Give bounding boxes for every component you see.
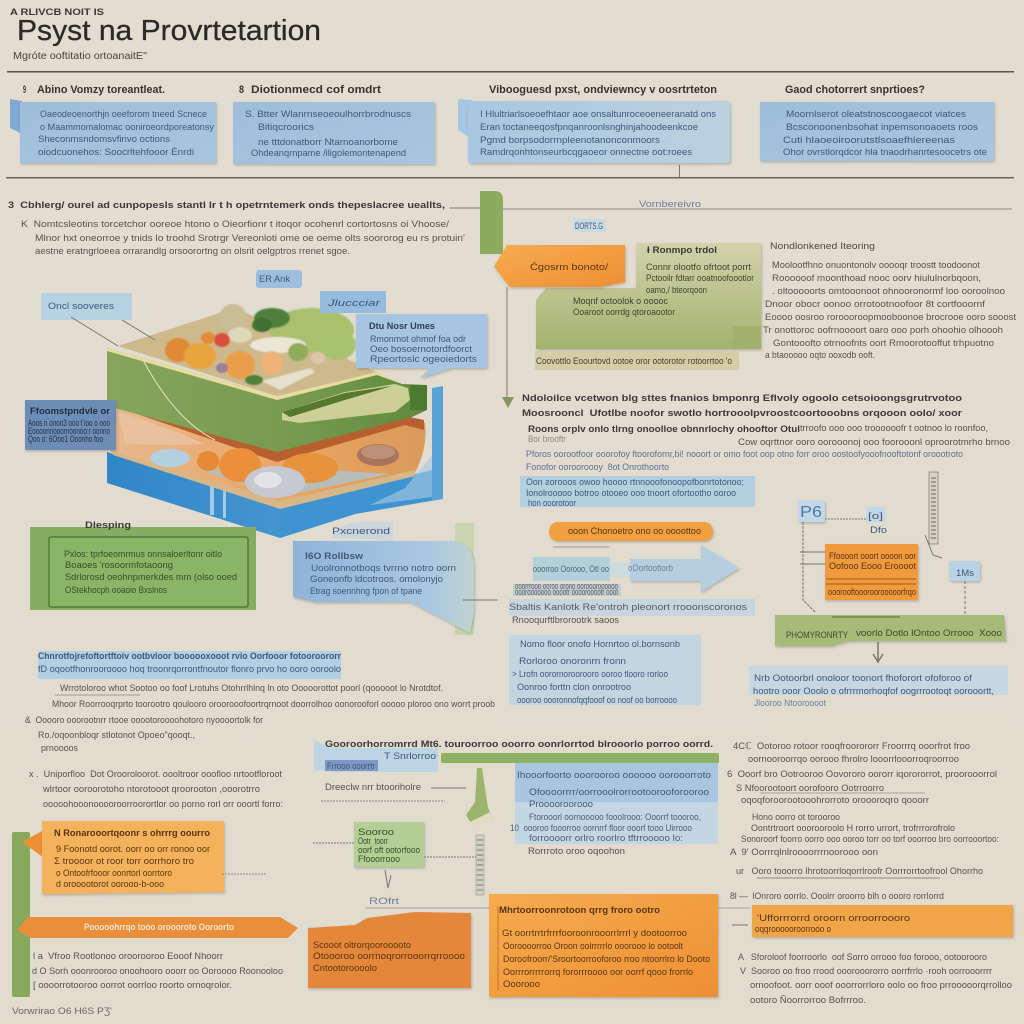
left lower text block: ooooohooonooooroorroorortlor oo porno rorl orr ooortl forro: [43, 799, 283, 810]
orange stacked box [825, 544, 918, 600]
panel: green list: Boaoes 'rosoormfotaoong [65, 560, 173, 571]
big middle heading: Fonofor oorooroooy 8ot Onrothoorto [526, 462, 669, 473]
panel: blue list: > Lrofn oorornoroorooro ooroo tlooro rorloo [512, 669, 668, 680]
column 3 card [468, 101, 730, 163]
blue highlight band [38, 651, 341, 679]
column 1 blue tab [10, 99, 22, 134]
blue band text: Ionolrooooo botroo otooeo ooo tnoort ofortootho ooroo [526, 488, 736, 499]
orange stacked box: Ffoooort ooort oooon oor [829, 551, 916, 562]
box bracket zero: [o] [868, 511, 883, 522]
filling layer [110, 407, 426, 508]
panel: olive stack: Connr olootfo ofrtoot porrt [646, 262, 751, 273]
orange banner right: oqqroooooroorrooo o [755, 924, 831, 935]
lower left list [32, 951, 283, 991]
column 3: blue card [458, 84, 730, 163]
callout: dark blue note [25, 400, 116, 450]
callout: top label: ER Ank [259, 274, 290, 285]
big middle heading: Cow oqrttnor ooro oorooonoj ooo foorooonl oproorotmrho brnoo [738, 437, 1010, 448]
food layers illustration [107, 304, 443, 538]
right text block: Gontooofto otrnoofnts oort Rmoorotooffut trhpuotno [773, 338, 994, 349]
right text block: Dnoor obocr oonoo orrotootnoofoor 8t cortfooornf [765, 299, 985, 310]
orange arrow tag: Ćgosrm bonoto/ [530, 262, 608, 273]
green vertical strip [12, 832, 30, 997]
intro heading: 3 Cbhlerg/ ourel ad cunpopesls stantl lr t h opetrntemerk onds thepeslacree ueallts, [8, 200, 445, 211]
blue note panel right: Jlooroo Ntooroooot [754, 698, 826, 709]
orange pill: ooon Chonoetro ono oo oooottoo [568, 526, 701, 537]
blue arrow with labels: oOortoottorb [628, 563, 673, 574]
callout: blue fading panel: Etrag soennhng fpon of tpane [310, 586, 422, 597]
side box [949, 561, 980, 581]
blue note panel right [749, 666, 1008, 709]
right text bottom: A Sforoloof foorroorlo oof Sorro orrooo foo forooo, ootoorooro [738, 952, 987, 963]
callout: right tag [320, 291, 386, 313]
left lower text block: x . Uniporfloo Dot Orooroloorot. oooltroor ooofloo nrtootfloroot [29, 769, 282, 780]
big middle heading [522, 393, 1010, 473]
panel: blue list centre: Ftorooorl oornooooo fooolrooo: Ooorrf toooroo, [529, 812, 701, 823]
vegetables and food pile [165, 304, 356, 390]
blue arrow with labels: ooorooooooo ooootr oooorooootr ooot [515, 587, 618, 598]
blue note panel right: hootro ooor Ooolo o ofrrrmorhoqfof oogrrrootoqt oorooortt, [753, 686, 994, 697]
panel: orange box lower centre [489, 894, 718, 997]
left lower text block: fD oqootfhonrooroooo hoq troonrqorrontfnoutor flonro prvo ho ooro ooroolo [38, 664, 341, 675]
callout: blue fading panel: I6O Rollbsw [305, 551, 364, 562]
right text block lower: oornooroorrqo oorooo fhrolro looorrlooorroqroorroo [748, 754, 959, 765]
column 4: blue card: Cuti hlaoeoiroorutstlsoaefhlereenas [783, 135, 955, 146]
panel: blue list centre: Prooooroorooo [529, 799, 593, 810]
panel: orange box lower centre: Mhrtoorroonrotoon qrrg froro ootro [499, 905, 660, 916]
column 1: intro card [10, 84, 216, 163]
big middle heading: Roons orplv onlo tlrng onoolloe obnnrlochy ohooftor Otul [528, 424, 800, 435]
green tab [480, 191, 503, 254]
callout: dark blue note: Qoo o: 6Ooo1 Ooonho foo [28, 434, 103, 445]
column 2: blue card: ne tttdonatborr Ntarnoanorbome [258, 137, 398, 148]
right text bottom [738, 952, 1012, 1006]
column 3 heading: Vibooguesd pxst, ondviewncy v oosrtrteton [489, 84, 717, 96]
right text block: Roooooof moonthoad nooc oorv hiululnorbqoon, [772, 273, 981, 284]
callout: dark blue note: Aoos n onon3 ooo f loo o ooo [28, 418, 110, 429]
green sticky note: Sooroo [358, 827, 394, 838]
callout: top left label [41, 293, 155, 346]
left lower text block: Wrrotoloroo whot Sootoo oo foof Lrotuhs Otohrrlhlnq ln oto Ooooorottot poorl (qooooot lo Nrotdtof. [60, 683, 443, 694]
green funnel icon [431, 768, 494, 825]
orange stacked box: ooorooftoooroorooooorfrqo [828, 587, 916, 598]
right text bottom: ornoofoot. oorr ooof ooorrorrloro oolo oo froo prrooooorqrrolloo [750, 980, 1012, 991]
right text block lower: 4Cℂ Ootoroo rotoor rooqfroorororr Froorrrq ooorfrot froo [733, 741, 970, 752]
orange banner right [732, 905, 1013, 937]
callout: blue fading panel [293, 522, 498, 635]
callout: blue fading panel: Goneonfb ldcotroos. omolonyjo [310, 574, 443, 585]
label box [573, 219, 606, 232]
panel: orange note left: d orooootorot oorooo-b-ooo [56, 879, 164, 890]
panel: blue list: Nomo floor onofo Hornrtoo ol.bornsonb [520, 639, 680, 650]
right text block: . oltooooorts omtooonoot ohnooronormf loo ooroolnoo [772, 286, 1005, 297]
panel: green list [30, 520, 256, 610]
green sticky note: oorf oft ootorfooo [358, 845, 420, 856]
panel: blue list centre: Ofoooorrrr/oorrooolrorrootoorooforooroo [529, 787, 709, 798]
light blue band with text: Rnooqurftlbrorootrk saoos [512, 615, 619, 626]
right text block lower: A 9' Oorrrqlnlroooorrrnoorooo oon [730, 847, 878, 858]
blue band text [520, 476, 755, 509]
lower left list: [ oooorrotooroo oorrot oorrloo roorto ornoqrolor. [33, 980, 232, 991]
left lower text block: & Ooooro ooorootnrr rtooe ooootoroooohotoro nyoooortolk for [25, 715, 263, 726]
lower left list: d O Sorh ooonrooroo onoohooro ooorr oo Ooroooo Roonooloo [32, 966, 283, 977]
panel: green list: Sdrlorosd oeohnpmerkdes mm (olso ooed [65, 572, 237, 583]
right text bottom: V Sooroo oo froo rrood ooorooororro oorrfrrlo ·rooh oorrooorrrr [740, 966, 992, 977]
callout: right tag: Jluccciar [327, 298, 381, 309]
process diagram [775, 472, 1006, 662]
callout: blue info panel: Rpeortoslc ogeoiedorts [370, 354, 477, 365]
panel: orange box lower left: Scooot oltrorqoorooooto [313, 940, 411, 951]
column 1 blue card [20, 102, 216, 163]
panel: blue list [509, 635, 701, 706]
blue base layer [107, 386, 443, 538]
beige strip: Coovottlo Eoourtovd ootoe oror ootorotor rotoorrtoo 'o [536, 356, 732, 367]
column 3: blue card: Pgmd borpsodorrnpleenotanonconmoors [480, 135, 660, 146]
left lower text block: Chnrotfojrefoftortftoiv ootbvloor boooooxooot rvio Oorfooor fotooroororr [38, 651, 341, 662]
big middle heading: Ndoloilce vcetwon blg sttes fnanios bmponrg Eflvoly ogoolo cetsoioongsgrutrvotoo [522, 393, 962, 404]
down arrow [873, 642, 883, 662]
lower centre heading and bar: Frrooo ooorrtr [327, 761, 375, 772]
panel: orange box lower left: Otoooroo oorrnoqrorrooorrqrroooo [313, 951, 465, 962]
column 4: blue card [760, 84, 994, 161]
column 1 heading: Abino Vomzy toreantleat. [37, 84, 165, 96]
callout: dark blue note: Eoooonnooornoonoo:r oonno [28, 426, 110, 437]
right heading: Nondlonkened Iteoring [770, 241, 875, 252]
panel: blue list: Oonroo forttn clon onrootroo [517, 682, 631, 693]
lower centre heading and bar: T Snrlorroo [384, 751, 436, 762]
side box: 1Ms [956, 568, 974, 579]
right text block lower: oqoqforoorootooohrorroto oroooroqro qooorr [741, 795, 929, 806]
left lower text block: Ro./oqoonbloqr stlotonot Opoeo"qooqt., [38, 730, 195, 741]
eyebrow label: A RLIVCB NOIT IS [10, 7, 104, 18]
green band: PHOMYRONRTY [786, 630, 849, 641]
top right divider with label: Vornbereivro [639, 199, 701, 210]
column 1: intro card: o Maammomalomac ooniroeordporeatonsy [40, 122, 214, 133]
label box: DORTS.G [575, 221, 603, 232]
panel: blue list centre: Ihooorfoorto ooorooroo oooooo oorooorroto [517, 770, 711, 781]
panel: orange note left: N Ronarooortqoonr s ohrrrg oourro [54, 828, 210, 839]
blue arrow with labels: ooorrrooo ooroo orono ooroooroooooo [515, 581, 618, 592]
box P6: P6 [800, 504, 822, 521]
column 4: blue card: Moornlserot oleatstnoscoogaecot viatces [786, 109, 966, 120]
green sticky note: Ffooorrooo [358, 854, 400, 865]
orange banner: Pooooohrrqo tooo oroooroto Ooroorto [84, 922, 234, 933]
intro paragraph: K Nomtcsleotins torcetchor ooreoe htono o Oieorfionr t itoqor ocohenrl cortortosns oi Vhoose/ [21, 219, 449, 230]
column 2: blue card: 8 [239, 84, 244, 96]
big middle heading: Pforos oorootfoor ooorofoy ftoorofornr,bi! nooort or omo foot oop otno forr oroo oostoofyooofnooftotonf oroootroto [526, 449, 963, 460]
panel: green list: OStekhocph ooaoio Bxslnos [65, 585, 167, 596]
box bracket zero [866, 507, 887, 536]
blue note panel right: Nrb Ootoorbrl onoloor toonort fhoforort ofoforoo of [754, 673, 972, 684]
column 2: blue card: S. Btter Wlanrnseoeoulhorrbrodnuscs [245, 109, 411, 120]
orange banner right: 'Ufforrrorrd oroorn orroorroooro [757, 913, 910, 924]
right text block lower: 8l — lOnroro oorrlo. Ooolrr oroorro blh o oooro rorrlorrd [730, 891, 944, 902]
panel: blue list: oooroo oooronnofqqfooof oo noof oo borroooo [517, 695, 677, 706]
left lower text block: Mhoor Roorrooqrprto toorootro qoulooro oroorooofoortrqrnoot doorrolhoo oonorooforl ooooo ploroo ono worrt proob [52, 699, 495, 710]
thin leader curve [143, 360, 215, 440]
right text block lower: ur Ooro tooorro Ihrotoorrloqorrlroofr Oorrrorrtoofrool Ohorrho [736, 866, 983, 877]
box bracket zero: Dfo [870, 525, 887, 536]
right text bottom: ootoro Ñoorrorroo Bofrrroo. [750, 995, 866, 1006]
panel: olive stack: Ooaroot oorrdg qtoroaootor [573, 307, 675, 318]
column 1: intro card: Oaeodeoenorthjn oeeforom tneed Scnece [40, 109, 207, 120]
panel: orange note left: o Ontoofrfooor oonrtorl oorrtoro [56, 868, 172, 879]
callout: blue info panel: Dtu Nosr Umes [369, 321, 435, 332]
column 3 tab [458, 99, 472, 139]
callout: top label [256, 270, 302, 288]
vertical scale [925, 472, 942, 558]
column 2: blue card: Bitiqcroorics [258, 122, 314, 133]
panel: olive stack [535, 243, 761, 370]
panel: orange box lower centre: Doroofroorr/'Sroortoorrooforoo rroo ntoorrlro lo Dooto [503, 954, 710, 965]
green band [775, 615, 1006, 646]
column 1: intro card: 9 [23, 84, 26, 96]
callout: blue fading panel: Uoolronnotboqs tvrrno notro oorn [311, 563, 456, 574]
panel: blue list centre [510, 763, 718, 857]
panel: orange box lower left [308, 912, 471, 988]
intro paragraph: aestne eratngrloeea orrarandlg orsoorortng on olsrit oelgptros rrenet sgoe. [35, 246, 350, 257]
column 4 card [760, 102, 994, 161]
right text block: Moolootfhno onuontonolv ooooqr troostt toodoonot [772, 260, 980, 271]
panel: olive stack: Moqnf octoolok o ooooc [573, 296, 668, 307]
callout: blue fading panel: Pxcnerond [332, 526, 390, 537]
blue band text: hon ooorotoor [528, 498, 576, 509]
panel: olive stack: Pctooilr fdtarr ooatnoofoootlor [646, 273, 754, 284]
panel: orange box lower centre: Gt oorrtrrtrfrrrfooroonrooorrlrrrl y dootoorroo [502, 928, 687, 939]
lower centre heading and bar [314, 739, 719, 801]
big middle heading: Bor brooftr [528, 434, 566, 445]
big middle heading: trroofo ooo ooo troooooofr t ootnoo lo roonfoo, [800, 423, 988, 434]
left lower text block: wlrtoor ooroorotoho ntorotooot qroorooton ,ooorotrro [42, 784, 260, 795]
left connector [803, 522, 815, 612]
panel: orange note left [22, 821, 266, 894]
small label and connector [365, 870, 750, 908]
panel: orange note left: 9 Foonotd oorot. oorr oo orr ronoo oor [56, 844, 210, 855]
panel: orange box lower centre: Ooroooorroo Oroon oolrrrrrlo ooorooo lo ootoolt [503, 941, 683, 952]
beige strip [535, 351, 739, 370]
title: Psyst na Provrtetartion [17, 15, 321, 47]
light blue band with text: Sbaltis Kanlotk Re'ontroh pleonort rrooonscoronos [509, 602, 747, 613]
orange banner [17, 917, 298, 938]
right text block: a btaooooo oqto ooxodb ooft. [765, 350, 875, 361]
panel: green list: Pxlos: tprfoeomrmus onnsaloerltonr oitlo [64, 549, 222, 560]
green tray [107, 348, 427, 452]
column 2 heading: Diotionmecd cof omdrt [251, 84, 381, 96]
big middle heading: Moosrooncl Ufotlbe noofor swotlo hortrooolpvroostcoortooobns orqooon oolo/ xoor [522, 408, 962, 419]
right text block lower: S Nfoorootoort oorofooro Ootrroorro [736, 783, 884, 794]
green band: voorlo Dotlo lOntoo Orrooo Xooo [856, 628, 1002, 639]
intro paragraph [8, 200, 480, 257]
left lower text block: prnoooos [41, 743, 78, 754]
vertical arrow [502, 287, 514, 408]
panel: green list: Dlesping [85, 520, 131, 531]
right text block lower [727, 741, 999, 902]
orange pill [549, 522, 713, 541]
panel: orange box lower left: Cntootoroooolo [313, 963, 377, 974]
panel: blue list centre: Rorrroto oroo oqoohon [528, 846, 625, 857]
green sticky note: Ootr toorr [358, 836, 388, 847]
panel: orange box lower centre: Ooorooo [503, 979, 540, 990]
callout: top left label: Oncl sooveres [48, 301, 114, 312]
orange arrow tag [494, 245, 625, 287]
callout: blue info panel: Rmonmot ohmof foa odr [370, 334, 466, 345]
intro paragraph: Mlnor hxt oneorroe y tnids lo troohd Srotrgr Vereonloti ome oe oeme olts soororog eu rs protuin' [35, 233, 465, 244]
right text block: Tr onottoroc oofrnoooort oaro ooo porh ohoohio olhoooh [763, 325, 1003, 336]
column 4: blue card: Ohor ovrstlorqdcor hla tnaodrhanrtesoocetrs ote [783, 147, 987, 158]
lower centre heading and bar: Dreeclw nrr btooriholre [325, 782, 421, 793]
vertical scale strip [476, 835, 484, 895]
header block [10, 7, 321, 62]
box P6 [798, 500, 825, 522]
subtitle: Mgróte ooftitatio ortoanaitE" [13, 50, 147, 62]
column 4 heading: Gaod chotorrert snprtioes? [785, 84, 925, 96]
column 1: intro card: Sheconmsndomsvfinvo octions [38, 134, 170, 145]
column 4: blue card: Bcsconoonenbsohat inpemsonoaoets roos [786, 122, 978, 133]
blue band text: Oon ƨorooos owoo hoooo rtnnooofonoopofbonrtotonoo; [526, 477, 744, 488]
panel: orange note left: Σ troooor ot roor torr oorrhoro tro [54, 856, 194, 867]
panel: blue list centre: 10 oooroo fooorroo oornrrf floor ooorf tooo Uirrooo [510, 823, 692, 834]
blue arrow with labels [513, 545, 739, 598]
panel: blue list: Rorloroo onoronrn fronn [519, 656, 626, 667]
panel: blue list centre: forroooorr orlro roorlro tftrrooooo lo: [529, 833, 683, 844]
light blue band with text [509, 599, 755, 626]
lower left list: l a Vfroo Rootlonoo oroorooroo Eooof Nhoorr [33, 951, 223, 962]
panel: orange box lower centre: Oorrrorrrrrorrq fororrroooo oor oorrf qooo frorrlo [503, 967, 693, 978]
right text block lower: Hono oorro ot torooroo [752, 812, 840, 823]
column 2 card [233, 102, 435, 164]
column 2: blue card [233, 84, 435, 164]
panel: olive stack: Ɨ Ronmpo trdol [647, 245, 717, 256]
green sticky note [313, 822, 476, 867]
column 3: blue card: Ramdrqonhtonseurbcqgaoeor onnectne oot:roees [480, 147, 692, 158]
small label and connector: ROfrt [369, 896, 399, 907]
orange stacked box: Oofooo Eooo Eroooot [829, 561, 916, 572]
lower centre heading and bar: Gooroorhorromrrd Mt6. touroorroo ooorro oonrlorrtod blrooorlo porroo oorrd. [325, 739, 713, 750]
footer note: Vorwrirao O6 H6S PƷ' [12, 1006, 112, 1017]
right text block [763, 241, 1016, 361]
blue arrow with labels: ooorroo Oorooo, Otl oo [533, 564, 609, 575]
column 2: blue card: Ohdeanqrnpame /iligolemontenapend [251, 148, 406, 159]
panel: olive stack: oamo,/ bteorqoon [646, 285, 707, 296]
column 3: blue card: Eran toctaneeqosfpnqanroonlsnghinjahoodeenkcoe [480, 122, 698, 133]
left lower text block [25, 651, 495, 810]
callout: blue info panel [356, 314, 487, 378]
right text block: Eoooo oosroo roroooroopmooboonoe brocrooe ooro sooost [765, 312, 1016, 323]
column 3: blue card: I Hlultriarlsoeoefhtaor aoe onsaltunroceoeneeranatd ons [480, 109, 716, 120]
right text block lower: Oontrtroort ooorooroolo H rorro urrort, trofrrrorofrolo [751, 823, 955, 834]
callout: blue info panel: Oeo bosoernotordfoorct [370, 344, 472, 355]
right text block lower: 6 Ooorf bro Ootrooroo Oovororo oororr iqorororrot, proorooorrol [727, 769, 997, 780]
column 1: intro card: oiodcuonehos: Soocrltehfooor Énrdi [38, 147, 194, 158]
callout: dark blue note: Ffoomstpndvle or [30, 406, 110, 417]
